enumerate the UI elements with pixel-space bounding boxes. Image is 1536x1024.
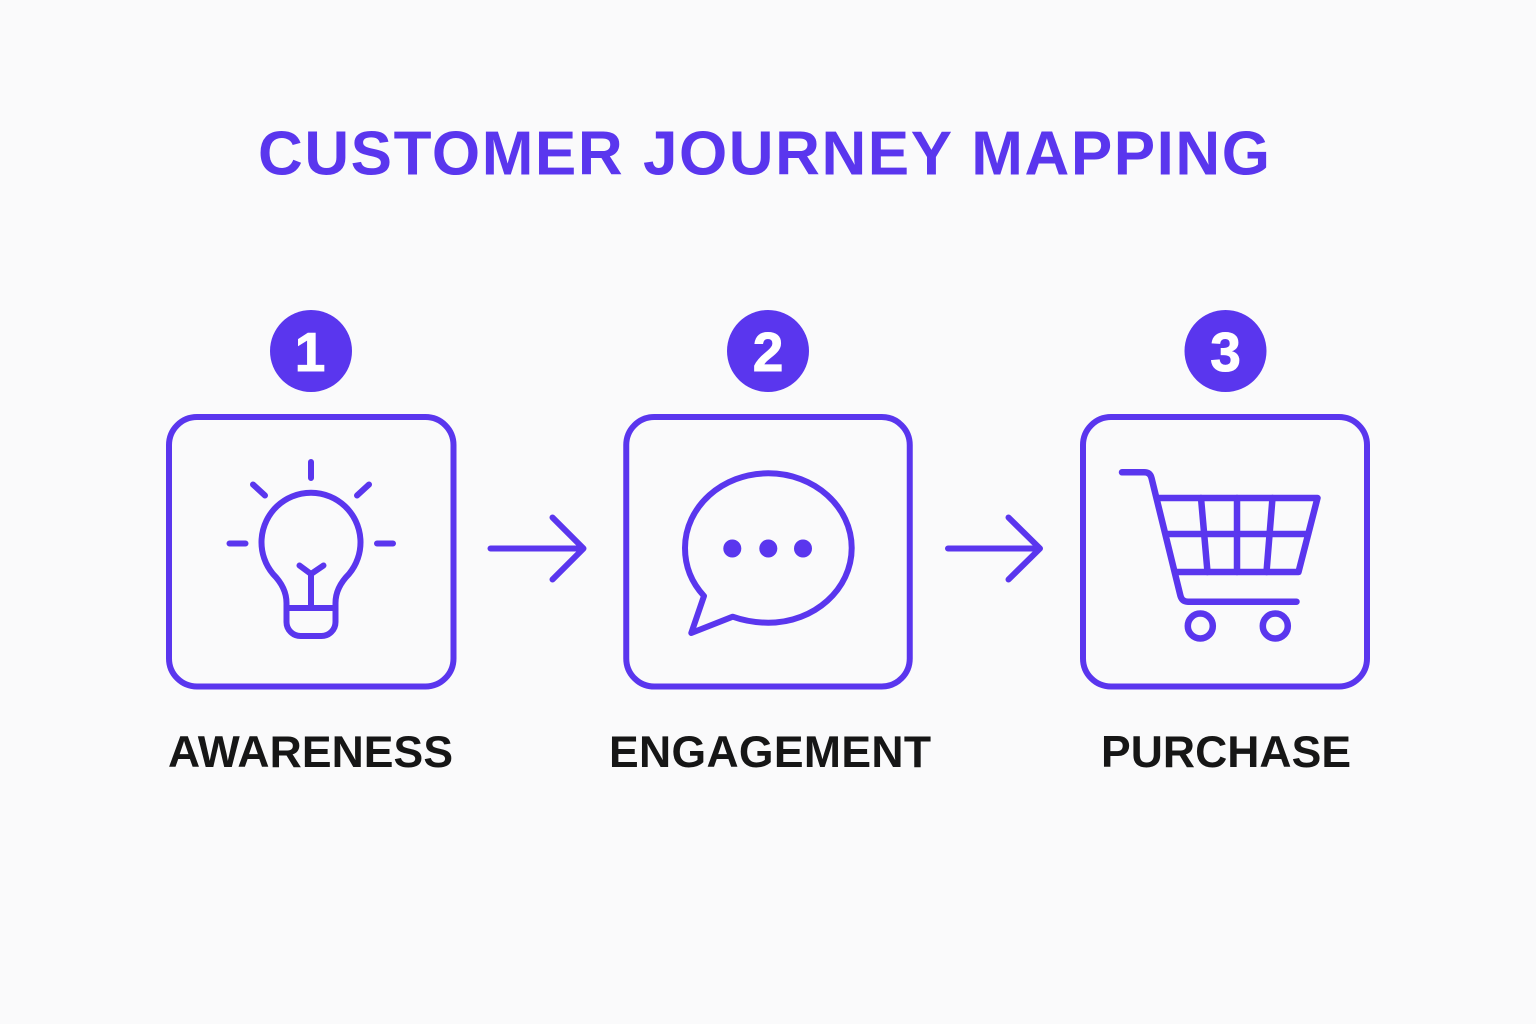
label: engagement: ENGAGEMENT (609, 728, 931, 777)
step 2: engagement (609, 310, 931, 777)
title: CUSTOMER JOURNEY MAPPING (258, 120, 1270, 188)
card 1 frame (169, 417, 454, 686)
icon: shopping cart (1122, 472, 1318, 638)
number badge 1: 1 (295, 321, 325, 383)
step 3: purchase (1083, 310, 1367, 777)
label: purchase: PURCHASE (1101, 728, 1351, 777)
card 2 frame (626, 417, 910, 686)
number badge 1 (270, 310, 352, 392)
number badge 2: 2 (753, 321, 783, 383)
number badge 3 (1184, 310, 1266, 392)
arrow 2 to 3 (948, 518, 1040, 580)
step 1: awareness (168, 310, 454, 777)
card 3 frame (1083, 417, 1367, 686)
label: awareness: AWARENESS (168, 728, 453, 777)
arrow 1 to 2 (490, 518, 584, 580)
icon: light bulb (230, 462, 393, 636)
number badge 2 (727, 310, 809, 392)
icon: speech bubble (685, 473, 852, 633)
number badge 3: 3 (1210, 321, 1241, 383)
